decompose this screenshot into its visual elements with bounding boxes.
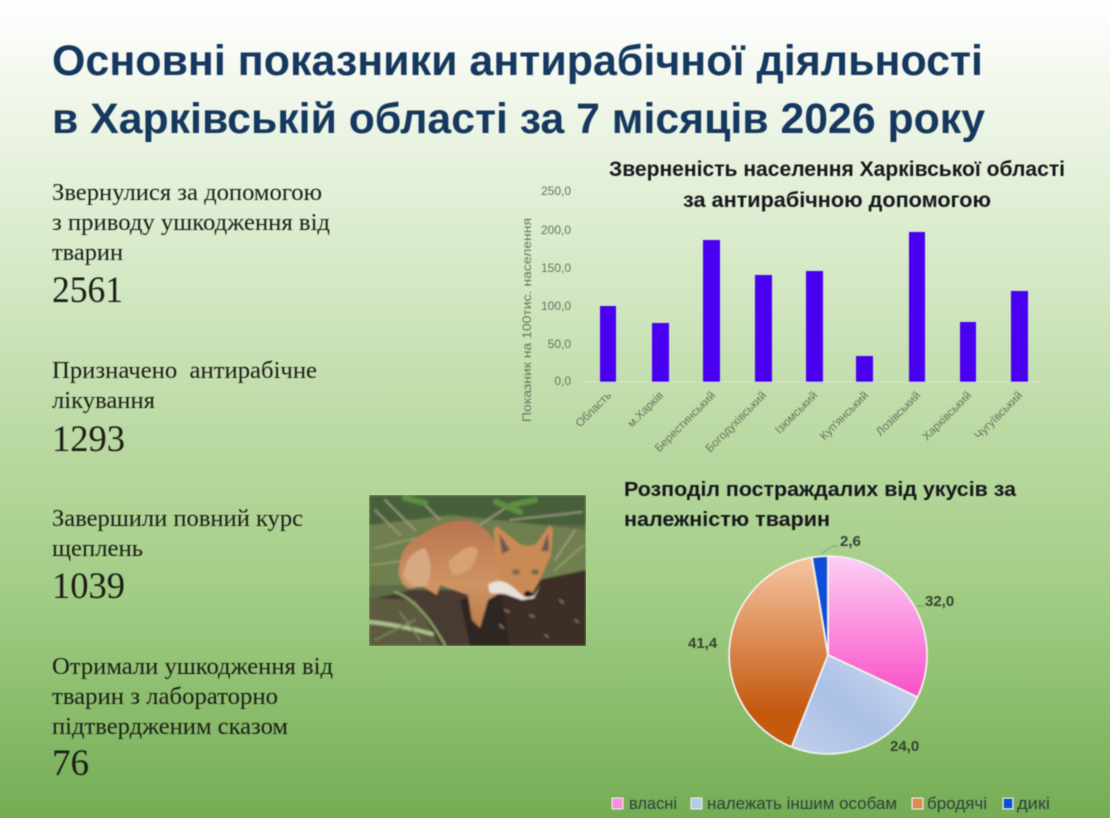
stat: confirmed rabies: тварин з лабораторно [52, 684, 278, 710]
category labels: Куп'янський [818, 390, 871, 443]
slice: own 32,0 [828, 556, 927, 697]
category labels: Чугуївський [973, 390, 1025, 442]
y axis ticks: 50,0 [548, 337, 571, 351]
slice: stray 41,4 [729, 557, 828, 747]
stat: treatment assigned: лікування [52, 388, 155, 414]
stat: sought help: тварин [52, 240, 123, 266]
pie chart: 24,0 [890, 738, 919, 755]
stat: completed course: 1039 [52, 566, 125, 607]
stat: completed course: Завершили повний курс [52, 506, 303, 532]
chart title: pie: Розподіл постраждалих від укусів за [624, 478, 1017, 501]
photo: fox [369, 495, 586, 646]
y axis ticks: 100,0 [541, 299, 571, 313]
category labels: Ізюмський [773, 390, 820, 437]
stat: sought help: 2561 [52, 270, 123, 311]
y axis ticks: 250,0 [541, 184, 571, 198]
pie chart [688, 533, 954, 755]
category labels: Богодухівський [704, 390, 769, 455]
chart title: pie [624, 478, 1017, 531]
legend [612, 794, 1050, 813]
stat: sought help [52, 180, 330, 311]
stat: treatment assigned: 1293 [52, 419, 125, 460]
legend: дикі [1017, 794, 1050, 813]
category labels: Харківський [921, 390, 974, 443]
category labels: м.Харків [626, 390, 666, 430]
category labels: Берестинський [653, 390, 718, 455]
bars [600, 232, 1028, 382]
category labels: Область [574, 390, 614, 430]
y axis ticks: 0,0 [554, 374, 571, 388]
y axis ticks: 200,0 [541, 223, 571, 237]
chart title: pie: належністю тварин [624, 508, 830, 531]
pie chart: 41,4 [688, 635, 718, 652]
stat: confirmed rabies: 76 [52, 743, 89, 784]
legend: належать іншим особам [707, 794, 897, 813]
stat: completed course [52, 506, 303, 607]
category labels [574, 390, 1025, 455]
legend: власні [629, 794, 677, 813]
slice: wild 2,6 [812, 556, 828, 655]
y axis ticks [541, 184, 571, 388]
stat: confirmed rabies: підтвердженим сказом [52, 714, 288, 740]
fox head [494, 525, 553, 597]
stat: confirmed rabies [52, 654, 333, 784]
bar chart [520, 184, 1045, 455]
pie chart: 32,0 [925, 593, 954, 610]
stat: confirmed rabies: Отримали ушкодження від [52, 654, 333, 680]
stat: sought help: Звернулися за допомогою [52, 180, 322, 206]
chart title: bar: за антирабічною допомогою [683, 189, 991, 212]
value labels: 2,6 [840, 533, 861, 550]
legend: бродячі [927, 794, 987, 813]
stat: sought help: з приводу ушкодження від [52, 210, 330, 236]
y axis ticks: 150,0 [541, 261, 571, 275]
title: в Харківській області за 7 місяців 2026 року [52, 95, 985, 143]
stat: treatment assigned: Призначено антирабічне [52, 358, 317, 384]
category labels: Лозівський [874, 390, 923, 439]
slice: others 24,0 [792, 655, 918, 754]
y axis title: Показник на 100тис. населення [520, 218, 534, 422]
fox body [399, 521, 505, 628]
chart title: bar [609, 158, 1065, 212]
title: Основні показники антирабічної діяльності [52, 37, 983, 85]
chart title: bar: Зверненість населення Харківської області [609, 158, 1065, 181]
stat: completed course: щеплень [52, 536, 143, 562]
title [52, 37, 985, 143]
stat: treatment assigned [52, 358, 317, 460]
